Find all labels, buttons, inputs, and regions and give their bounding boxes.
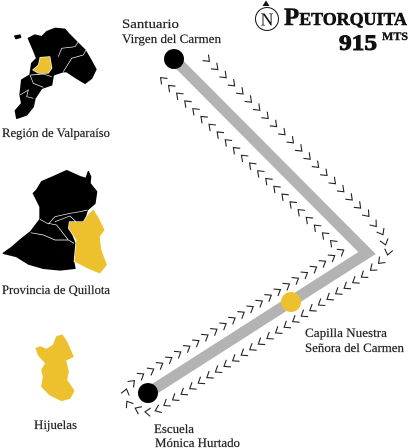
stop: Capilla Nuestra Señora del Carmen: Señora del Carmen xyxy=(305,340,404,355)
stop: Santuario Virgen del Carmen: Santuario xyxy=(122,16,179,31)
panel: Hijuelas map xyxy=(34,335,77,432)
title: Petorquita 915 mts xyxy=(284,4,408,55)
label: Región de Valparaíso: Región de Valparaíso xyxy=(2,125,110,140)
stop: Santuario Virgen del Carmen: Virgen del Carmen xyxy=(122,31,221,46)
stop: Santuario Virgen del Carmen xyxy=(122,16,221,69)
route line xyxy=(148,59,367,393)
stop: Escuela Mónica Hurtado: Escuela xyxy=(154,421,194,436)
panel: Provincia de Quillota map xyxy=(2,171,110,297)
title: Petorquita 915 mts: PETORQUITA xyxy=(284,4,407,31)
label: Hijuelas: Hijuelas xyxy=(34,417,77,432)
map: province silhouette xyxy=(3,171,107,274)
title: Petorquita 915 mts: MTS xyxy=(382,29,408,43)
stop: Capilla Nuestra Señora del Carmen: Capilla Nuestra xyxy=(305,325,387,340)
title: Petorquita 915 mts: 915 xyxy=(339,30,377,55)
stop: Capilla Nuestra Señora del Carmen xyxy=(281,292,404,355)
panel: Región de Valparaíso map xyxy=(2,28,110,140)
icon: north compass xyxy=(256,0,278,30)
arrows: outbound chevrons around the route xyxy=(126,60,388,412)
map: region silhouette xyxy=(15,28,96,118)
icon: north compass: N xyxy=(260,10,274,30)
arrows: return chevrons along the upper inner side xyxy=(162,79,332,242)
stop: Escuela Mónica Hurtado xyxy=(138,383,240,448)
label: Provincia de Quillota: Provincia de Quillota xyxy=(2,282,110,297)
map: Hijuelas silhouette xyxy=(36,335,74,401)
